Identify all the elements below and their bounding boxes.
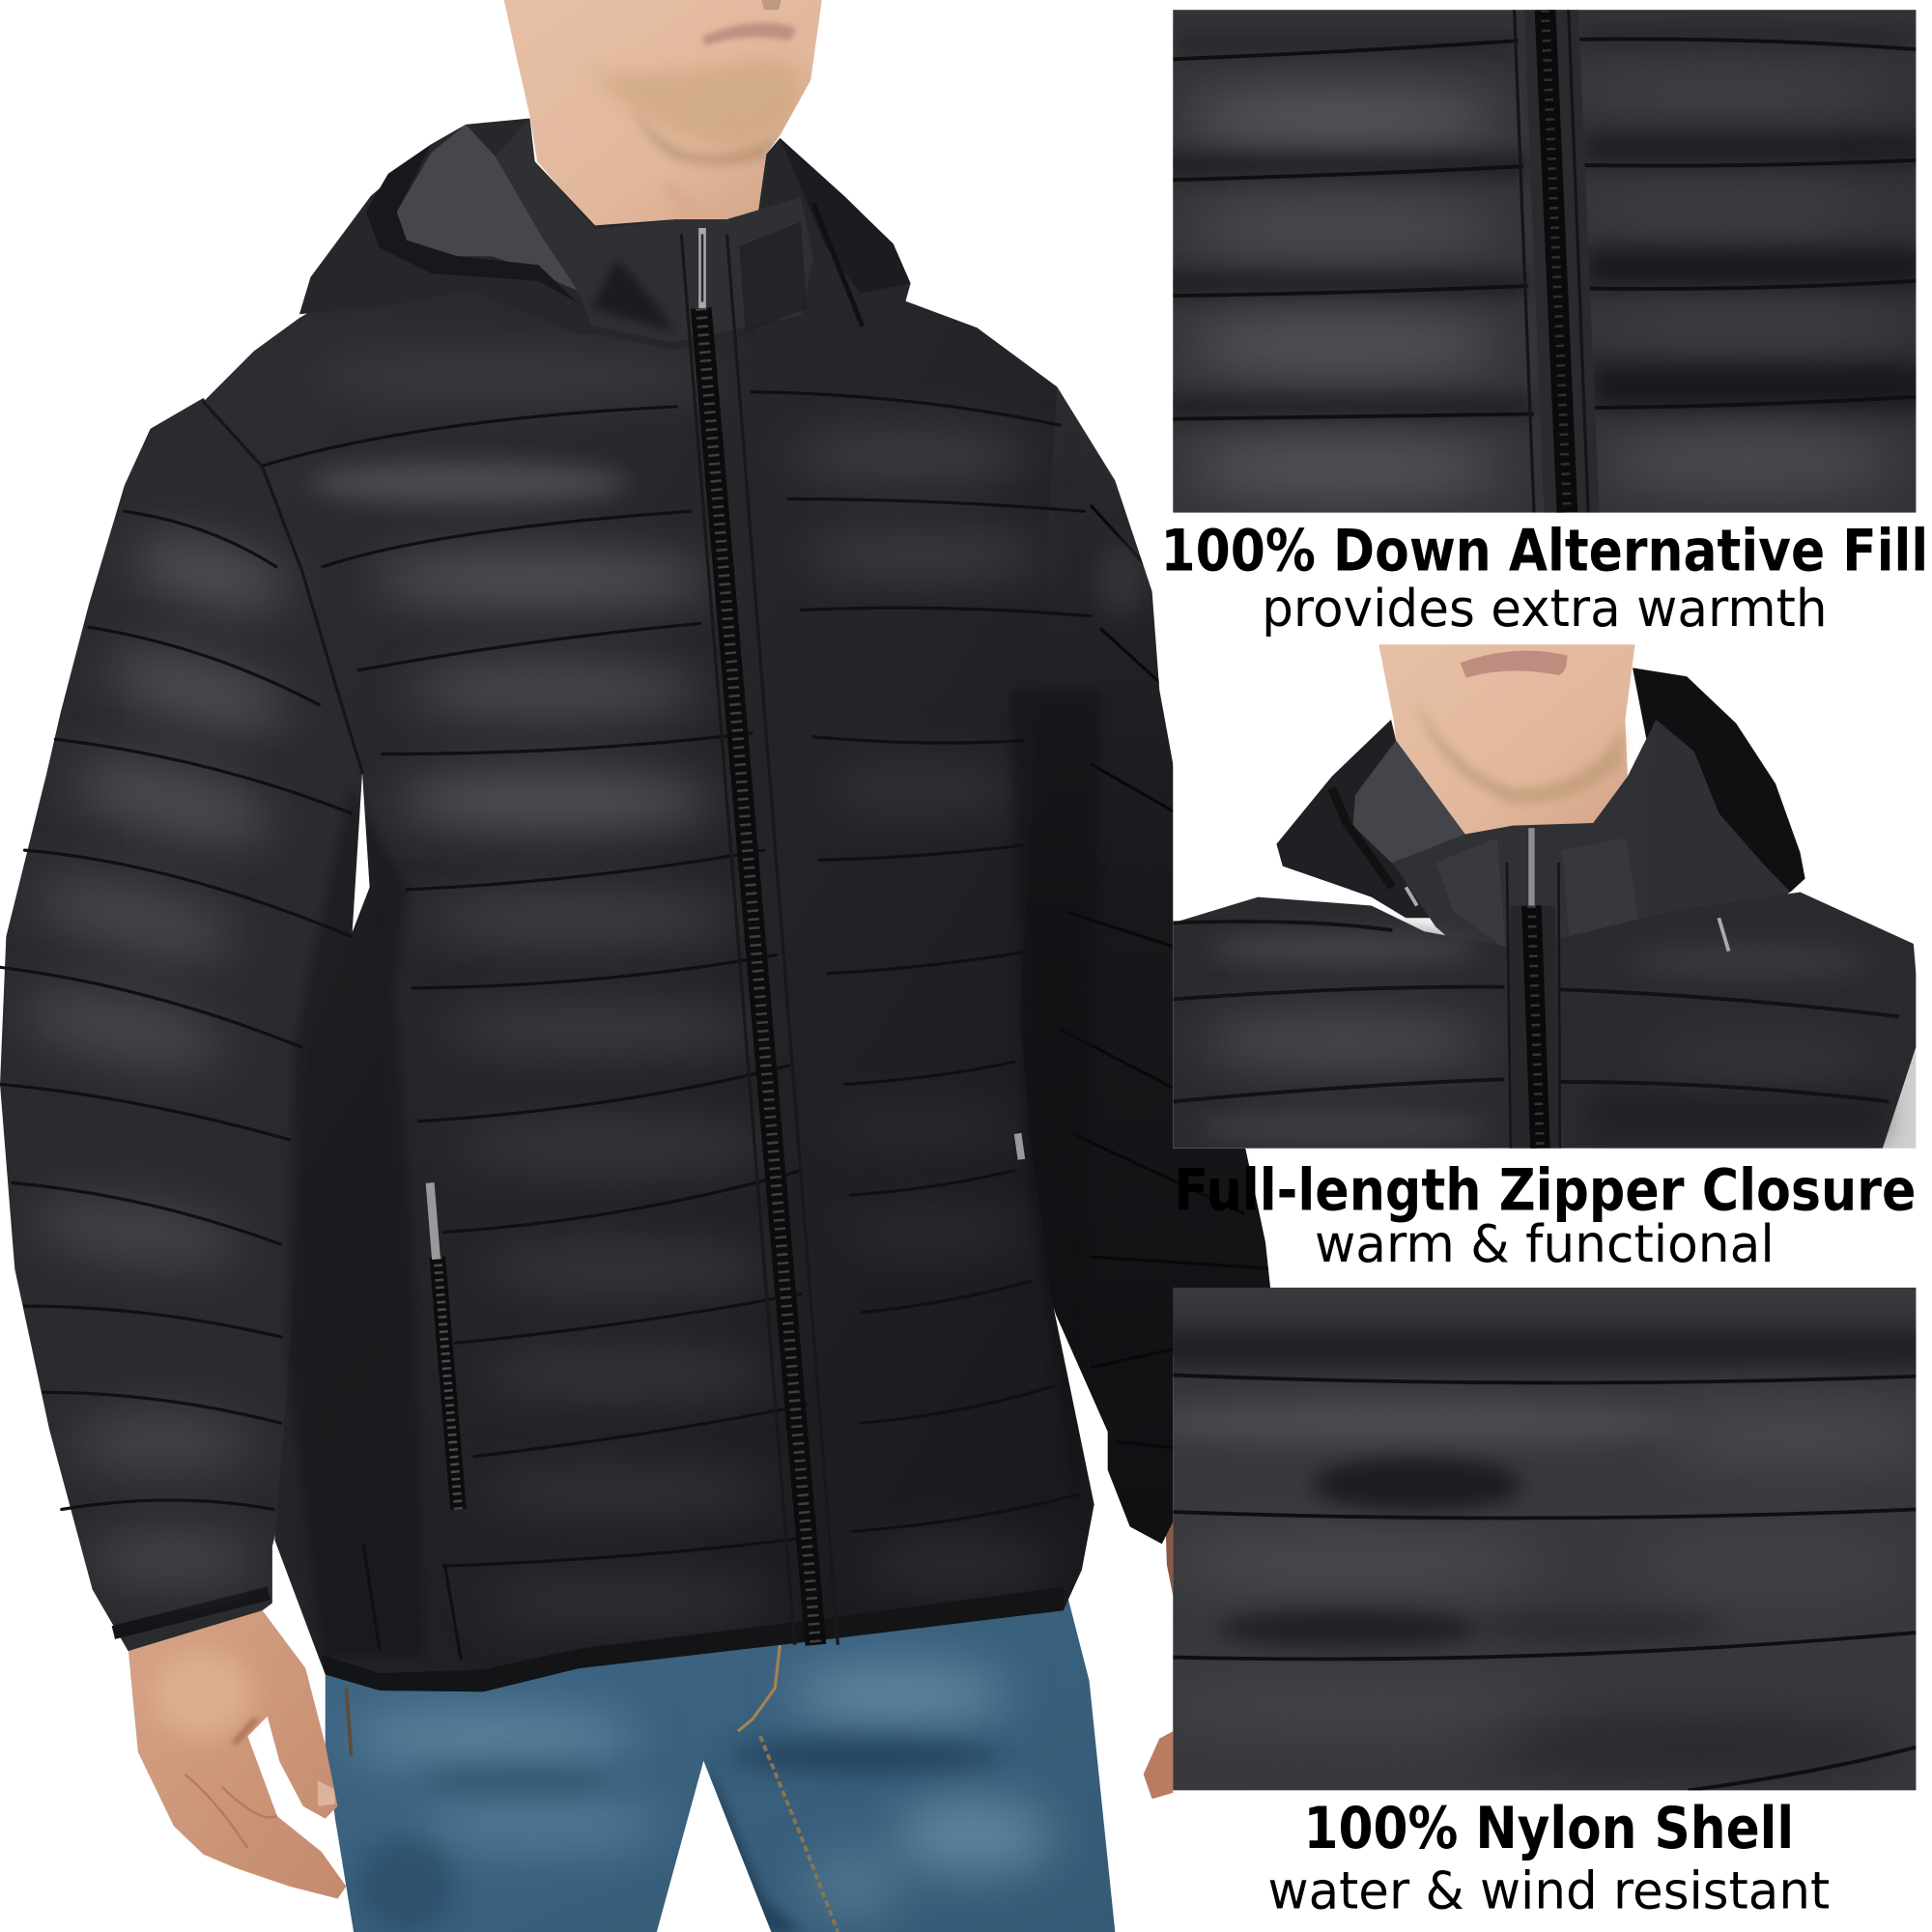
jacket body bbox=[203, 277, 1094, 1691]
jeans bbox=[326, 1589, 1115, 1932]
hood lining bbox=[1633, 668, 1805, 899]
model photo: man wearing the jacket bbox=[0, 0, 1282, 1932]
jacket sheen highlights bbox=[14, 352, 1103, 1658]
face and neck bbox=[1378, 644, 1635, 850]
hood right bbox=[1644, 720, 1791, 916]
jacket front bbox=[1173, 892, 1916, 1149]
caption: full-length zipper bbox=[1175, 1157, 1916, 1274]
caption: down alternative fill bbox=[1161, 518, 1928, 639]
caption: nylon shell: 100% Nylon Shell bbox=[1303, 1795, 1794, 1862]
quilted seams on jacket front bbox=[0, 392, 1091, 1659]
panel: down alternative fill close-up bbox=[1158, 10, 1928, 513]
hem band bbox=[322, 1587, 1064, 1691]
left pocket zipper bbox=[430, 1182, 458, 1509]
caption: nylon shell: water & wind resistant bbox=[1267, 1861, 1830, 1921]
right hand bbox=[1144, 1521, 1173, 1799]
right pocket zipper pull bbox=[1018, 1133, 1021, 1159]
main zipper bbox=[681, 228, 838, 1645]
right sleeve bbox=[1020, 386, 1270, 1544]
caption: full-length zipper: warm & functional bbox=[1315, 1213, 1775, 1274]
hood inner panel bbox=[397, 125, 578, 291]
caption: down alternative fill: provides extra warmth bbox=[1262, 578, 1828, 639]
left sleeve bbox=[0, 398, 362, 1651]
hood bbox=[299, 118, 911, 350]
panel: nylon shell close-up bbox=[1146, 1288, 1932, 1790]
panel: zipper closure close-up bbox=[1173, 644, 1916, 1149]
caption: nylon shell bbox=[1267, 1795, 1830, 1921]
zipper bbox=[1509, 906, 1559, 1149]
face and neck bbox=[504, 0, 822, 229]
left hand bbox=[128, 1610, 346, 1899]
hood left bbox=[1276, 720, 1464, 918]
collar bbox=[1393, 721, 1656, 947]
collar bbox=[496, 118, 813, 343]
